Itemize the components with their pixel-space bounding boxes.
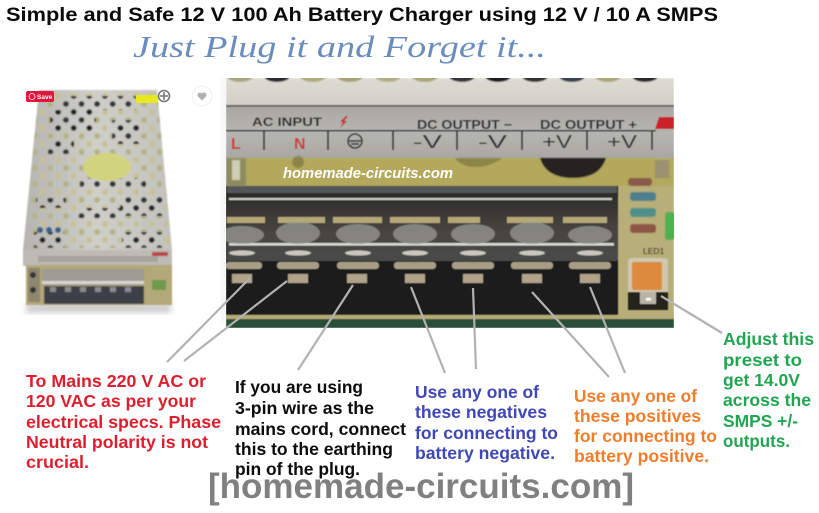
title: Simple and Safe 12 V 100 Ah Battery Charger using 12 V / 10 A SMPS [6,4,718,26]
text: preset adjustment note: preset to [723,350,802,370]
text: negative terminal note: these negatives [415,402,547,422]
screw washers [226,262,611,269]
text: earth pin note [235,377,406,479]
subtitle: Just Plug it and Forget it... [133,29,546,64]
LED1 label: LED1 [643,246,665,256]
panel: close-up photo of terminals [220,70,675,328]
N terminal label: N [294,136,306,153]
text: earth pin note: 3-pin wire as the [235,398,374,418]
L terminal label: L [231,136,241,153]
text: preset adjustment note: get 14.0V [723,370,801,390]
text: mains connection note: electrical specs. Phase [26,412,221,432]
text: earth pin note: If you are using [235,377,363,397]
text: preset adjustment note: across the [723,390,811,410]
text: earth pin note: this to the earthing [235,439,393,459]
clear cover [227,193,618,261]
minus V labels: -V [413,132,442,152]
text: negative terminal note: for connecting to [415,423,558,443]
text: positive terminal note: for connecting to [574,426,717,446]
circuit board [226,156,675,320]
terminal block [220,186,674,328]
panel: product photo of SMPS [22,82,224,318]
text: mains connection note: Neutral polarity is not [26,432,208,452]
zoom icon [158,90,170,102]
DC output negative label: DC OUTPUT − [417,118,512,132]
earth symbol [348,134,362,148]
AC input label: AC INPUT [252,117,322,129]
save button: Save [37,94,53,101]
text: positive terminal note: Use any one of [574,386,697,406]
text: positive terminal note [574,386,717,466]
text: negative terminal note: Use any one of [415,382,539,402]
text: mains connection note: crucial. [26,452,89,472]
text: earth pin note: mains cord, connect [235,419,406,439]
text: preset adjustment note [723,329,814,451]
text: earth pin note: pin of the plug. [235,459,360,479]
text: preset adjustment note: Adjust this [723,329,814,349]
text: negative terminal note: battery negative. [415,443,555,463]
top metal band [226,78,674,106]
plus V label 2: +V [607,132,637,152]
save button [26,91,54,102]
product shadow [26,303,171,313]
pointer lines [167,278,722,377]
text: mains connection note: To Mains 220 V AC or [26,371,206,391]
watermark in photo: homemade-circuits.com [283,166,453,182]
lightning icon [340,116,348,128]
text: positive terminal note: battery positive. [574,446,709,466]
text: negative terminal note [415,382,558,463]
red tag [655,117,674,129]
heart button [192,86,212,106]
text: preset adjustment note: outputs. [723,431,790,451]
SMPS unit [23,90,172,305]
plus V label: +V [542,132,572,152]
screw tabs [232,274,600,283]
minus V label 2: -V [478,132,507,152]
text: positive terminal note: these positives [574,406,701,426]
preset potentiometer [628,258,668,310]
yellow highlight [136,95,157,103]
label strip [226,105,674,159]
text: mains connection note [26,371,221,472]
website watermark: [homemade-circuits.com] [208,467,634,506]
text: preset adjustment note: SMPS +/- [723,411,798,431]
DC output positive label: DC OUTPUT + [540,118,637,132]
text: mains connection note: 120 VAC as per your [26,391,196,411]
